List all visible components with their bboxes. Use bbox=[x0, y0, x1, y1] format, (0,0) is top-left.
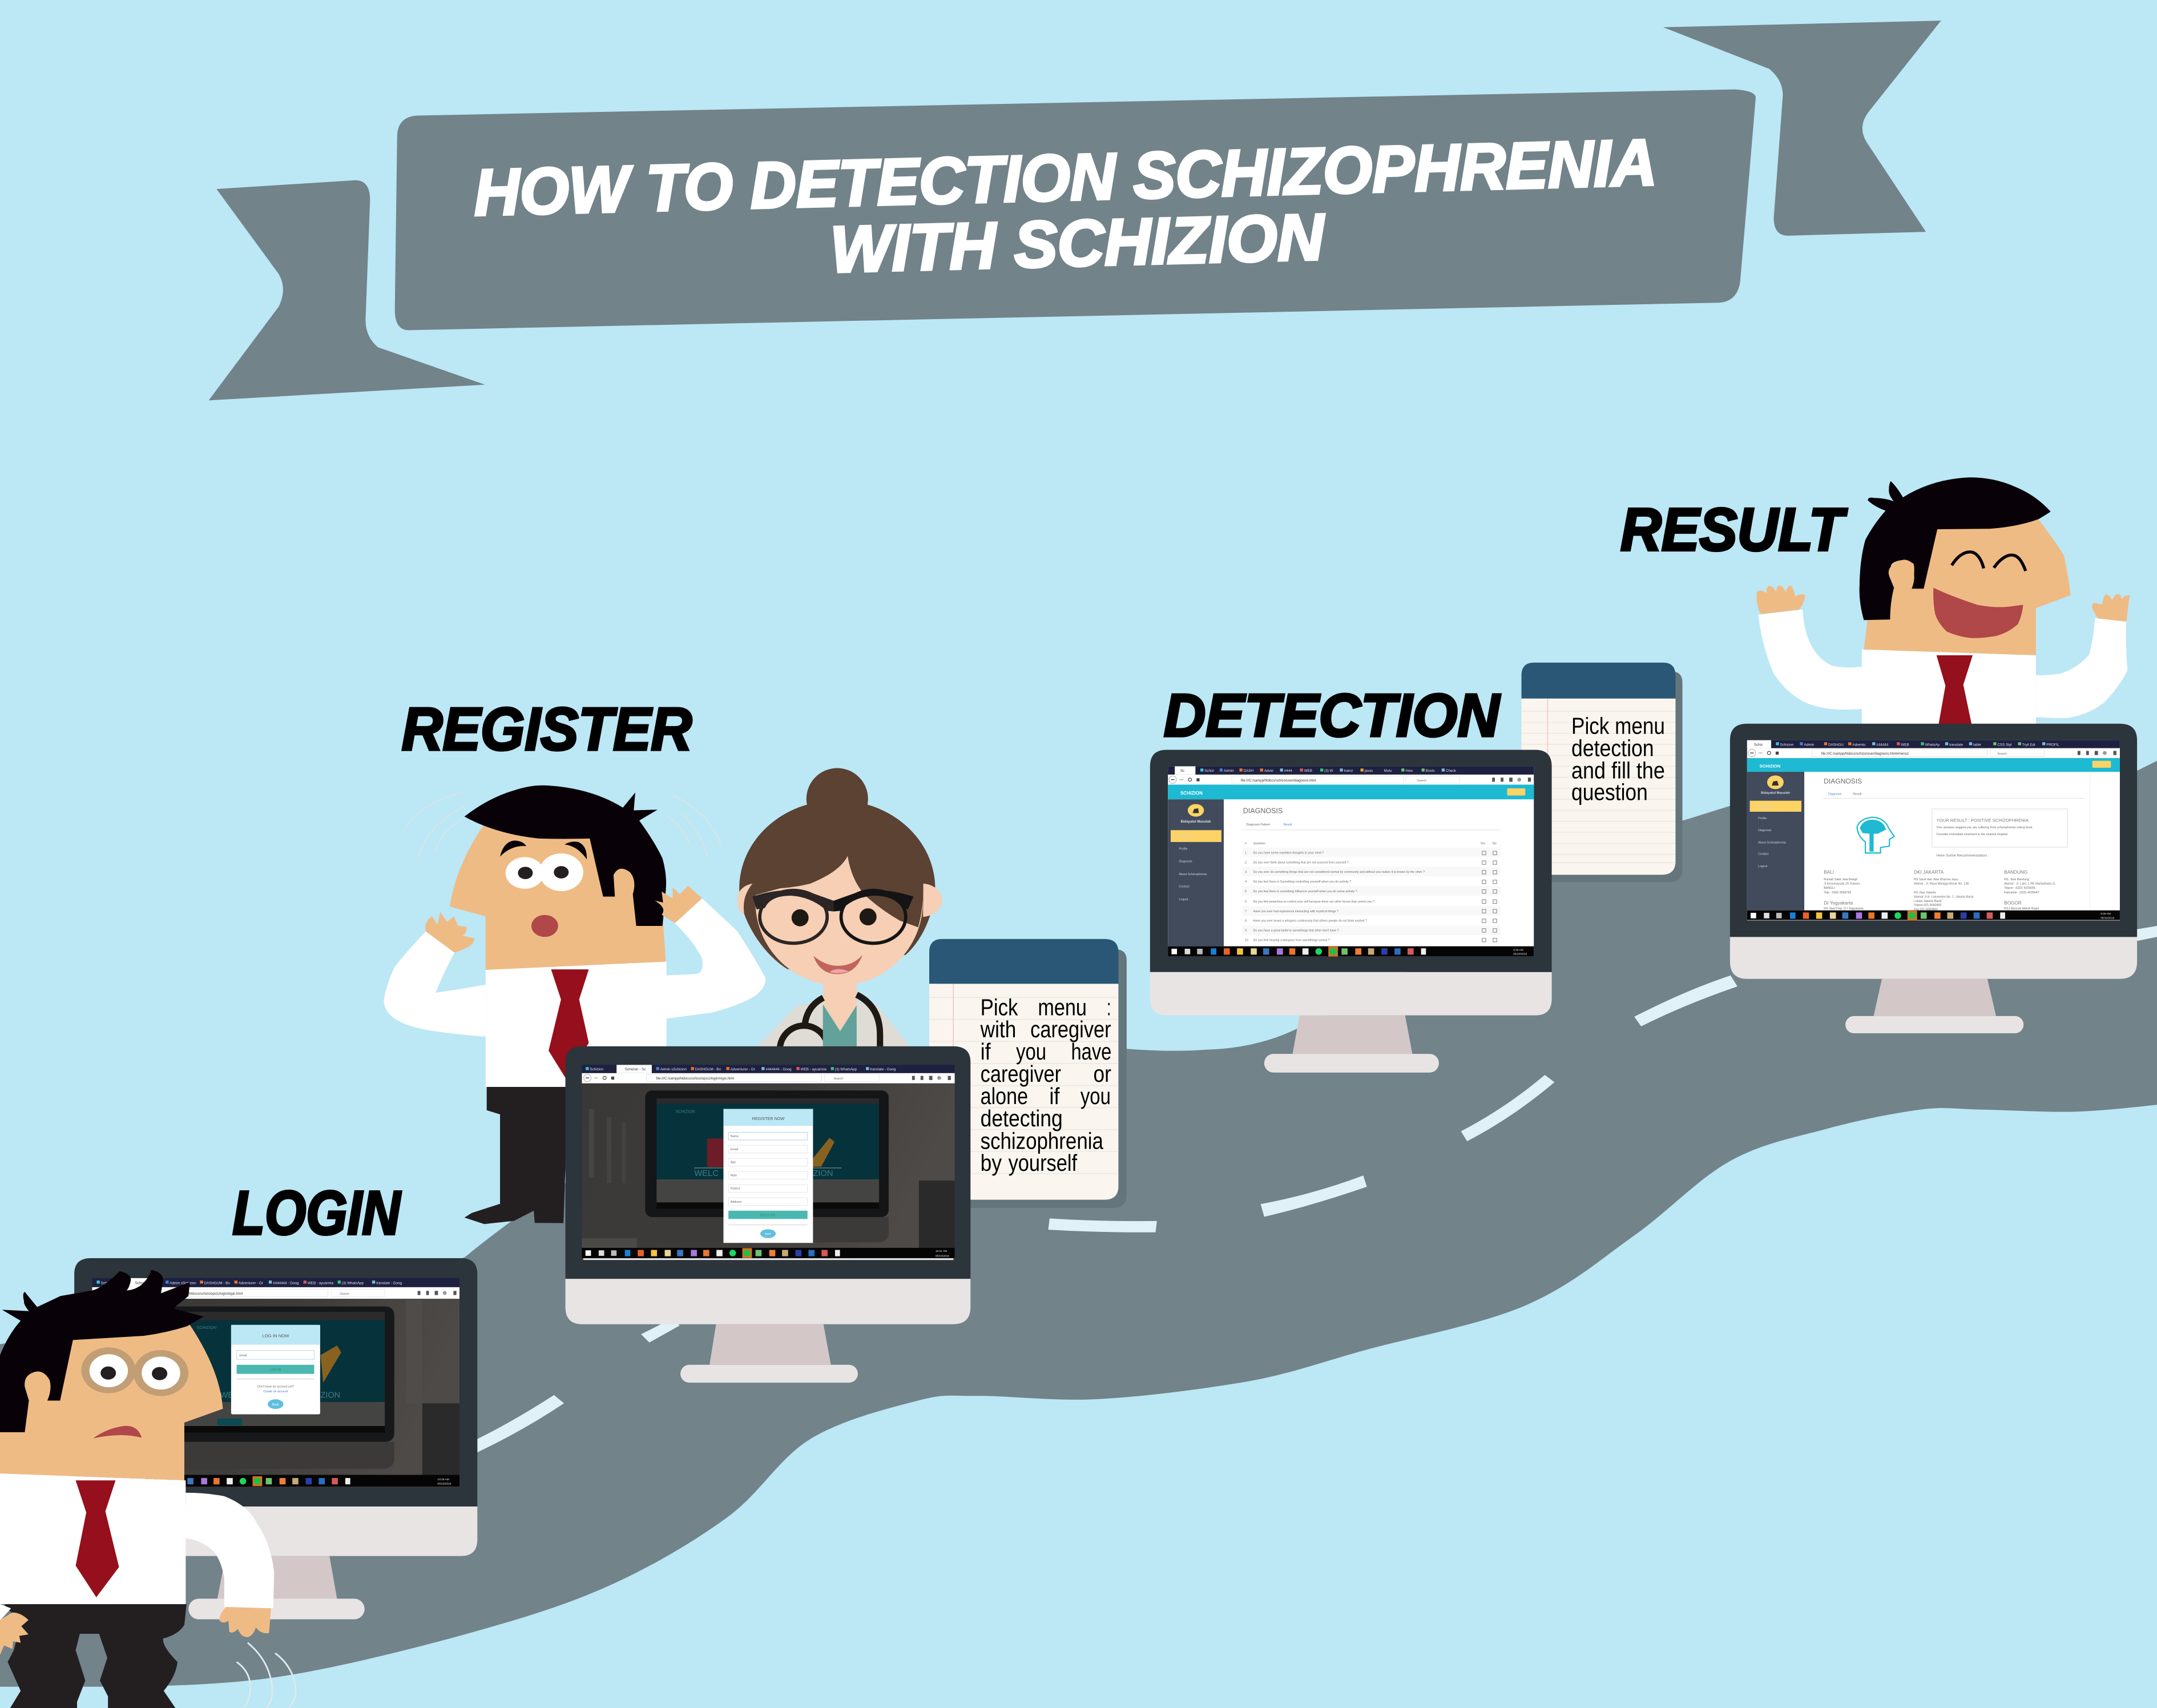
screen: diagnosis form: 05/10/2018 bbox=[1513, 953, 1527, 956]
screen: diagnosis form: 1 bbox=[1245, 851, 1247, 855]
screen: register page: (3) WhatsApp bbox=[835, 1068, 857, 1071]
screen: diagnosis form: 2 bbox=[1245, 861, 1247, 864]
mouth bbox=[93, 1426, 142, 1439]
hair back bbox=[739, 800, 935, 969]
note paper bbox=[1522, 699, 1675, 875]
screen: diagnosis form: Question bbox=[1253, 842, 1265, 845]
screen: result page: RS Jiwa Prop. D.I Yogyakarta bbox=[1824, 907, 1864, 911]
screen: result page: PROFIL bbox=[2046, 743, 2059, 747]
screen: result page: Fax 021-5682843 bbox=[1914, 908, 1938, 911]
screen: diagnosis form: Do you ever think about something that are not sourced from yourself ? bbox=[1253, 861, 1349, 864]
note text: : bbox=[1107, 994, 1111, 1021]
screen: diagnosis form: 5 bbox=[1245, 890, 1247, 893]
screen: register page: DASHGUM - Bo bbox=[695, 1068, 721, 1071]
note text: have bbox=[1071, 1038, 1111, 1065]
screen: login page: Schizion bbox=[101, 1281, 115, 1285]
screen: result page: Telpon 021-5682842 bbox=[1914, 904, 1941, 907]
screen: diagnosis form: Do you feel there is something influence yourself when you do some activity ? bbox=[1253, 890, 1357, 893]
screen: diagnosis form: Search bbox=[1417, 779, 1426, 783]
face bbox=[450, 824, 666, 970]
screen: diagnosis form: Do you have a great belief in somethings that other don't have ? bbox=[1253, 929, 1339, 933]
screen: register page: ZION bbox=[813, 1169, 833, 1178]
character: happy man (result) bbox=[1756, 477, 2130, 729]
left hand bbox=[0, 1613, 29, 1655]
screen: login page: Admin sSchizion bbox=[170, 1281, 196, 1285]
trousers bbox=[4, 1604, 187, 1708]
screen: diagnosis form: Contact bbox=[1179, 885, 1190, 888]
screen: diagnosis form: 4 bbox=[1245, 880, 1247, 884]
screen: register page: 10:31 AM bbox=[936, 1250, 947, 1253]
right hand bbox=[219, 1607, 271, 1637]
screen: result page: Diagnosis bbox=[1828, 793, 1842, 796]
login dialog: Email bbox=[239, 1354, 247, 1357]
screen: diagnosis form: 10 bbox=[1245, 938, 1248, 942]
note text: caregiver bbox=[981, 1061, 1061, 1087]
character: surprised man (register) bbox=[384, 785, 765, 1224]
screen: result page: RS Jiwa Jakarta bbox=[1914, 891, 1936, 895]
screen: result page: Dashboard bbox=[1758, 805, 1773, 808]
screen: diagnosis form: 3 bbox=[1245, 871, 1247, 874]
monitor neck bbox=[1293, 1016, 1412, 1054]
face bbox=[755, 818, 923, 985]
monitor frame bbox=[1730, 724, 2137, 937]
monitor: detection bbox=[1150, 750, 1552, 1073]
register dialog: REGISTER bbox=[760, 1214, 776, 1217]
screen: register page bbox=[582, 1065, 955, 1260]
login dialog: LOG IN NOW bbox=[262, 1334, 289, 1339]
monitor neck bbox=[709, 1324, 831, 1365]
screen: diagnosis form: Do you feel hearing a whispers from somethings unreal ? bbox=[1253, 938, 1330, 942]
hair fringe bbox=[744, 806, 925, 927]
ears bbox=[737, 884, 752, 914]
screen: register page: Adventurer - Gr bbox=[731, 1068, 755, 1071]
tie bbox=[549, 969, 589, 1080]
scrubs bbox=[823, 1004, 857, 1048]
note text: and fill the bbox=[1571, 757, 1665, 783]
left arm bbox=[1758, 610, 1862, 710]
register dialog: Back bbox=[765, 1232, 771, 1236]
screen: result page: Telp : 0366 3568782 bbox=[1824, 891, 1851, 895]
screen: diagnosis form: DASH bbox=[1244, 769, 1253, 773]
monitor: register bbox=[566, 1046, 970, 1383]
login dialog: Create an account bbox=[263, 1390, 288, 1393]
glasses bbox=[752, 890, 913, 943]
pupils bbox=[792, 909, 809, 926]
screen: diagnosis form: #444 bbox=[1284, 769, 1292, 773]
screen: result page: BOGOR bbox=[2004, 901, 2022, 906]
screen: diagnosis form: Do you feel there is Something controlling yourself when you do activity ? bbox=[1253, 880, 1351, 884]
hair bun bbox=[807, 768, 868, 830]
note text: menu bbox=[1038, 994, 1087, 1021]
note header bbox=[929, 939, 1118, 984]
screen: login page: SCHIZION bbox=[197, 1325, 216, 1330]
screen: result page: DKI JAKARTA bbox=[1914, 869, 1944, 875]
screen: diagnosis form: Bidayatul Masulah bbox=[1181, 820, 1211, 824]
screen: result page: Lokasi Jakarta Barat bbox=[1914, 900, 1942, 903]
monitor foot bbox=[1845, 1016, 2023, 1033]
screen: login page: #444444 - Goog bbox=[273, 1281, 299, 1285]
note: with caregiver bbox=[929, 939, 1127, 1208]
motion lines bbox=[405, 792, 721, 859]
screen: register page: Admin sSchizion bbox=[660, 1068, 687, 1071]
screen: result page: Bidayatul Masulah bbox=[1761, 792, 1790, 795]
monitor chin bbox=[1150, 972, 1552, 1016]
heading: detection: DETECTION bbox=[1164, 682, 1501, 749]
screen: diagnosis form: DIAGNOSIS bbox=[1243, 807, 1283, 815]
screen: diagnosis form: Logout bbox=[1179, 898, 1188, 901]
open mouth bbox=[1933, 588, 2023, 638]
screen: result page: RS Saraf dan Jiwa Dharma Jaya, bbox=[1914, 878, 1958, 881]
neck bbox=[823, 980, 857, 1031]
face bbox=[1864, 519, 2070, 655]
screen: diagnosis form: Sc bbox=[1180, 769, 1184, 773]
monitor frame bbox=[74, 1258, 477, 1506]
monitor foot bbox=[680, 1365, 858, 1383]
stethoscope bbox=[780, 994, 880, 1074]
screen: diagnosis form: Result bbox=[1284, 823, 1292, 827]
result card bbox=[1932, 809, 2067, 847]
hair bbox=[465, 785, 666, 926]
title line 2: WITH SCHIZION bbox=[829, 200, 1326, 287]
note shadow bbox=[1530, 671, 1683, 882]
monitor neck bbox=[1874, 979, 1996, 1016]
shirt bbox=[486, 962, 667, 1087]
monitor foot bbox=[188, 1598, 365, 1620]
screen: result page: file:///C:/xampp/htdocs/schizo/user/diagnosis.html#menu1 bbox=[1821, 752, 1909, 756]
monitor: result bbox=[1730, 724, 2137, 1033]
character: doctor bbox=[737, 768, 942, 1074]
login dialog bbox=[231, 1325, 320, 1415]
screen: diagnosis form: Have you ever heard a whispers continously that others poeple do not think existed ? bbox=[1253, 920, 1367, 923]
screen: login page: Adventurer - Gr bbox=[239, 1281, 263, 1285]
road bbox=[0, 761, 2157, 1687]
monitor chin bbox=[566, 1279, 970, 1324]
heading: result: RESULT bbox=[1620, 496, 1848, 563]
monitor neck bbox=[217, 1556, 337, 1598]
screen: register page: 05/10/2018 bbox=[936, 1254, 949, 1258]
screen: register page: #444444 - Goog bbox=[765, 1068, 792, 1071]
note text: detection bbox=[1571, 735, 1654, 761]
note text: by bbox=[981, 1150, 1002, 1176]
note text: or bbox=[1094, 1061, 1111, 1087]
note text bbox=[1571, 713, 1665, 805]
screen: result page: Schiz bbox=[1754, 743, 1763, 747]
screen: result page: About Schizophrenia bbox=[1758, 841, 1786, 844]
note: detection bbox=[1522, 663, 1683, 882]
note header bbox=[1522, 663, 1675, 699]
screen: result page: Tryit Edi bbox=[2022, 743, 2035, 747]
screen: result page: Alamat : Jl. Laks. L RE Martadinata 11 bbox=[2004, 883, 2055, 886]
right arm bbox=[2036, 618, 2127, 718]
screen: diagnosis form: WEB bbox=[1304, 769, 1312, 773]
screen: login page: (3) WhatsApp bbox=[342, 1281, 364, 1285]
right hand bbox=[2092, 594, 2130, 622]
screen: result page bbox=[1747, 740, 2120, 921]
login dialog: Back bbox=[272, 1403, 279, 1407]
eyes bbox=[506, 857, 544, 889]
screen: diagnosis form: 9 bbox=[1245, 929, 1247, 933]
note text: Pick bbox=[981, 994, 1018, 1021]
screen: result page: Contact bbox=[1758, 853, 1769, 856]
screen: diagnosis form: # bbox=[1245, 842, 1247, 845]
left hand bbox=[1756, 585, 1805, 614]
screen: result page: DIAGNOSIS bbox=[1824, 778, 1862, 785]
screen: login page: WELC bbox=[220, 1391, 244, 1400]
screen: diagnosis form bbox=[1168, 766, 1534, 956]
screen: diagnosis form: Admin bbox=[1224, 769, 1234, 773]
character: worried man (login) bbox=[0, 1270, 296, 1708]
screen: result page: Alamat Jl dr. Latumeten No. 1, Jakarta Barat bbox=[1914, 896, 1974, 899]
screen: diagnosis form: SCHIZION bbox=[1180, 791, 1203, 796]
screen: diagnosis form: How bbox=[1405, 769, 1413, 773]
result card: Consider immediate treatment to the nearest hospital bbox=[1936, 833, 2007, 836]
screen: login page: WEB - ayuarista bbox=[308, 1281, 334, 1285]
register dialog: Name bbox=[731, 1135, 739, 1138]
note text bbox=[980, 994, 1111, 1176]
screen: register page: SCHIZION bbox=[675, 1109, 695, 1114]
face bbox=[0, 1321, 223, 1480]
screen: login page: Schizion bbox=[135, 1281, 149, 1285]
tie bbox=[76, 1480, 119, 1597]
screen: result page: RS. Jiwa Bandung bbox=[2004, 878, 2029, 881]
register dialog: Male bbox=[731, 1174, 737, 1178]
screen: result page: Admin bbox=[1804, 743, 1815, 747]
screen: diagnosis form: Have you ever had experience interacting with mystical things ? bbox=[1253, 910, 1338, 913]
note paper bbox=[929, 984, 1118, 1200]
right arm bbox=[186, 1493, 274, 1608]
screen: result page: table bbox=[1973, 743, 1981, 747]
note ruled lines bbox=[929, 984, 1118, 1200]
tie bbox=[1937, 655, 1973, 729]
brain head icon bbox=[1857, 817, 1894, 853]
note shadow bbox=[938, 949, 1127, 1208]
left arm bbox=[384, 932, 486, 1037]
hair bbox=[1860, 477, 2051, 620]
eyes bbox=[90, 1354, 128, 1387]
note ruled lines bbox=[1522, 699, 1675, 875]
screen: diagnosis form: Diagnosis bbox=[1179, 860, 1192, 864]
screen: register page: WELC bbox=[694, 1169, 719, 1178]
screen: result page: BANDUNG bbox=[2004, 869, 2027, 875]
tongue bbox=[829, 969, 849, 973]
screen: login page: Search bbox=[340, 1292, 349, 1296]
screen: diagnosis form: Dashboard bbox=[1179, 835, 1194, 839]
screen: register page: WEB - ayuarista bbox=[801, 1068, 826, 1071]
screen: diagnosis form: (3) W bbox=[1324, 769, 1333, 773]
screen: result page: Here Some Recommendation : bbox=[1936, 853, 1989, 857]
register dialog: Email bbox=[731, 1148, 738, 1151]
login dialog: Don't have an account yet? bbox=[257, 1385, 294, 1389]
right hand bbox=[655, 886, 702, 923]
note text: yourself bbox=[1009, 1150, 1078, 1176]
screen: result page: Schizion bbox=[1780, 743, 1794, 747]
screen: diagnosis form: Do you ever do something things that are not considered normal by community and without you realize it is known by the other ? bbox=[1253, 871, 1425, 874]
banner main panel bbox=[395, 90, 1756, 330]
screen: diagnosis form: Yes bbox=[1480, 842, 1485, 845]
screen: register page: Search bbox=[834, 1077, 843, 1081]
screen: result page: Profile bbox=[1758, 817, 1767, 820]
screen: diagnosis form: Profile bbox=[1179, 847, 1188, 851]
register dialog: REGISTER NOW bbox=[752, 1116, 784, 1121]
left cuff bbox=[0, 1604, 11, 1621]
screen: register page: translate - Goog bbox=[870, 1068, 896, 1071]
shaking lines bbox=[237, 1643, 296, 1707]
register dialog bbox=[723, 1109, 813, 1243]
screen: result page: CSS Styl bbox=[1997, 743, 2011, 747]
smiling eyes bbox=[1952, 552, 2026, 571]
right arm bbox=[667, 899, 765, 1018]
screen: login page: file:///C:/xampp/htdocs/schizo/opsi1/login/login.html bbox=[165, 1292, 243, 1296]
coat bbox=[755, 1002, 912, 1048]
shirt bbox=[1862, 650, 2036, 729]
monitor chin bbox=[1730, 937, 2137, 979]
register dialog: Address bbox=[731, 1201, 742, 1204]
left hand bbox=[425, 912, 474, 953]
screen: result page: WhatsAp bbox=[1925, 743, 1940, 747]
monitor: login bbox=[74, 1258, 477, 1620]
screen: login page: 05/10/2018 bbox=[437, 1482, 451, 1485]
banner right ribbon bbox=[1663, 21, 1941, 236]
screen: result page: BALI bbox=[1824, 869, 1834, 875]
screen: result page: Faksimile : (022) 4205447 bbox=[2004, 891, 2039, 895]
screen: diagnosis form: Diagnosis Patient bbox=[1247, 823, 1270, 827]
screen: result page: Rumah Sakit Jiwa Bangli bbox=[1824, 878, 1857, 881]
screen: diagnosis form: Adver bbox=[1264, 769, 1273, 773]
note text: alone bbox=[981, 1083, 1028, 1109]
screen: result page: Telpon : (022) 4203655 bbox=[2004, 887, 2035, 890]
screen: diagnosis form: 7 bbox=[1245, 910, 1247, 913]
banner left ribbon bbox=[209, 180, 485, 400]
screen: result page: Jl Kesumayuda 29, Kawan, bbox=[1824, 883, 1860, 886]
screen: result page: WEB bbox=[1901, 743, 1909, 747]
screen: result page: BANGLI bbox=[1824, 887, 1835, 890]
note text: caregiver bbox=[1030, 1016, 1111, 1042]
result card: YOUR RESULT : POSITIVE SCHIZOPHRENIA bbox=[1936, 817, 2029, 823]
screen: result page: Diagnosis bbox=[1758, 829, 1772, 832]
heading: login: LOGIN bbox=[232, 1178, 402, 1247]
screen: diagnosis form: Schizi bbox=[1204, 769, 1214, 773]
screen: diagnosis form: Check bbox=[1446, 769, 1457, 773]
screen: result page: Alamat : Jl. Raya Mangga Besar No. 138 bbox=[1914, 883, 1969, 886]
screen: diagnosis form: Do you have some repetitive thoughts in your mind ? bbox=[1253, 851, 1324, 855]
monitor foot bbox=[1264, 1054, 1439, 1073]
screen: diagnosis form: 8 bbox=[1245, 920, 1247, 923]
note text: if bbox=[981, 1038, 991, 1065]
screen: diagnosis form: No bbox=[1493, 842, 1497, 845]
shirt bbox=[0, 1473, 186, 1604]
screen: login page: translate - Goog bbox=[376, 1281, 402, 1285]
monitor frame bbox=[1150, 750, 1552, 972]
note text: detecting bbox=[981, 1105, 1063, 1131]
note text: you bbox=[1016, 1038, 1046, 1065]
screen: register page: file:///C:/xampp/htdocs/schizo/opsi1/login/regis.html bbox=[656, 1077, 734, 1081]
screen: result page: Logout bbox=[1758, 865, 1768, 868]
note text: you bbox=[1080, 1083, 1111, 1109]
screen: diagnosis form: Mutu bbox=[1384, 769, 1392, 773]
trousers bbox=[465, 1087, 568, 1224]
note text: if bbox=[1049, 1083, 1060, 1109]
screen: result page: Search bbox=[1997, 752, 2007, 756]
register dialog: Patient bbox=[731, 1187, 740, 1191]
mouth bbox=[531, 915, 558, 937]
screen: diagnosis form: Do you feel powerless to control your self because there are other forces that control you ? bbox=[1253, 900, 1374, 904]
screen: register page: Schizion - Sc bbox=[625, 1068, 646, 1071]
note text: with bbox=[980, 1016, 1016, 1042]
screen: result page: DI Yogyakarta bbox=[1824, 901, 1853, 906]
title banner bbox=[209, 21, 1941, 400]
screen: login page: DASHGUM - Bo bbox=[204, 1281, 230, 1285]
screen: result page: 8:35 AM bbox=[2100, 912, 2111, 916]
heading: register: REGISTER bbox=[402, 695, 692, 763]
road dashes bbox=[477, 926, 2157, 1452]
scrubs overlap bbox=[823, 1025, 857, 1048]
screen: result page: #44444 bbox=[1876, 743, 1889, 747]
screen: result page: Result bbox=[1853, 793, 1862, 796]
screen: diagnosis form: javas bbox=[1364, 769, 1373, 773]
screen: diagnosis form: About Schizophrenia bbox=[1179, 873, 1207, 876]
screen: login page bbox=[92, 1278, 459, 1487]
note text: Pick menu bbox=[1571, 713, 1665, 739]
screen: diagnosis form: transl bbox=[1344, 769, 1353, 773]
result card: Your answers suggest you are suffering from schizophrenia critical level. bbox=[1936, 826, 2033, 829]
note text: schizophrenia bbox=[981, 1127, 1103, 1154]
screen: result page: 05/10/2018 bbox=[2100, 916, 2115, 920]
smile bbox=[813, 955, 862, 974]
monitor frame bbox=[566, 1046, 970, 1279]
screen: result page: translate bbox=[1949, 743, 1964, 747]
screen: result page: RSJ Marzuki Mahdi Bogor bbox=[2004, 907, 2039, 911]
screen: register page: Schizion bbox=[590, 1068, 604, 1071]
screen: diagnosis form: 6 bbox=[1245, 900, 1247, 904]
eyebrows bbox=[500, 841, 587, 859]
title line 1: HOW TO DETECTION SCHIZOPHRENIA bbox=[473, 126, 1658, 229]
screen: login page: 10:29 AM bbox=[437, 1478, 449, 1481]
register dialog: Age bbox=[731, 1161, 736, 1165]
screen: diagnosis form: file:///C:/xampp/htdocs/schizo/user/diagnosis.html bbox=[1241, 779, 1316, 783]
login dialog: LOG IN bbox=[271, 1368, 281, 1372]
screen: result page: SCHIZION bbox=[1759, 763, 1781, 768]
monitor chin bbox=[74, 1506, 477, 1556]
screen: login page: ZION bbox=[321, 1391, 340, 1400]
screen: diagnosis form: 9:35 AM bbox=[1513, 948, 1523, 952]
note text: question bbox=[1571, 779, 1648, 805]
screen: diagnosis form: Boots bbox=[1426, 769, 1435, 773]
hair bbox=[0, 1270, 204, 1432]
screen: result page: Adventu bbox=[1852, 743, 1866, 747]
screen: result page: DASHGU bbox=[1828, 743, 1844, 747]
eye rings bbox=[81, 1347, 135, 1393]
